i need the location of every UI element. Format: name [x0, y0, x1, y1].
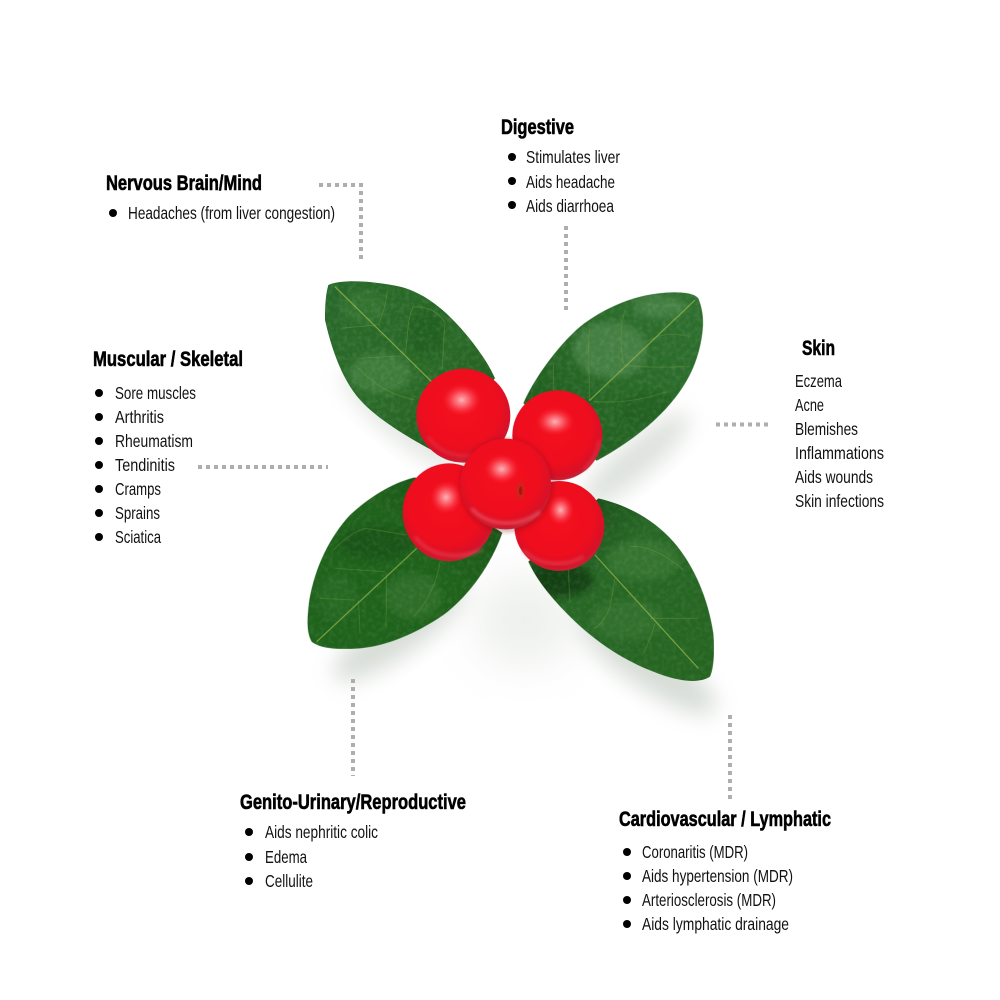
panel: digestive	[501, 116, 620, 216]
connector: nervous	[319, 185, 361, 260]
heading: Digestive	[501, 116, 574, 139]
bullet list	[623, 842, 793, 934]
bullet list: Coronaritis (MDR)	[642, 842, 748, 862]
berry: top left	[416, 369, 510, 463]
leaf: bottom right	[523, 495, 720, 685]
bullet list: Arthritis	[115, 407, 164, 427]
bullet list	[508, 147, 620, 216]
heading: Skin	[802, 337, 835, 360]
connector: skin	[716, 422, 772, 426]
bullet list: Tendinitis	[115, 455, 175, 475]
midrib	[335, 287, 432, 382]
plain list: Skin infections	[795, 491, 884, 511]
leaf and berry drop shadow	[322, 358, 728, 730]
heading: Muscular / Skeletal	[93, 348, 243, 371]
connector: genito-urinary	[351, 679, 355, 776]
heading: Nervous Brain/Mind	[106, 172, 262, 195]
connector: muscular	[198, 465, 328, 469]
connector: cardiovascular	[728, 715, 732, 800]
bullet list: Sore muscles	[115, 383, 196, 403]
berry: top right	[512, 390, 602, 480]
title: plant illustration of wintergreen leaves and berries	[303, 277, 728, 730]
midrib	[595, 555, 698, 668]
bullet list: Cellulite	[265, 871, 313, 891]
panel: genito-urinary / reproductive	[240, 791, 466, 891]
bullet list: Aids headache	[526, 172, 615, 192]
bullet list: Sciatica	[115, 527, 161, 547]
bullet list	[95, 383, 196, 547]
bullet item: Headaches (from liver congestion)	[128, 203, 335, 223]
plain list: Eczema	[795, 371, 842, 391]
bullet list: Aids hypertension (MDR)	[642, 866, 793, 886]
panel: nervous	[106, 172, 335, 223]
bullet list: Aids diarrhoea	[526, 196, 614, 216]
plain list: Aids wounds	[795, 467, 873, 487]
bullet list: Sprains	[115, 503, 160, 523]
bullet list: Cramps	[115, 479, 161, 499]
heading: Cardiovascular / Lymphatic	[619, 808, 831, 831]
bullet list	[245, 822, 378, 891]
leaf: bottom left	[303, 473, 507, 653]
bullet list: Edema	[265, 847, 307, 867]
leaf: top left	[325, 281, 495, 450]
plain list: Blemishes	[795, 419, 858, 439]
panel: cardiovascular / lymphatic	[619, 808, 831, 934]
plain list	[795, 371, 884, 511]
panel: skin	[795, 337, 884, 511]
bullet list: Aids lymphatic drainage	[642, 914, 789, 934]
bullet list: Arteriosclerosis (MDR)	[642, 890, 776, 910]
berry: centre	[460, 439, 553, 532]
bullet list: Stimulates liver	[526, 147, 620, 167]
bullet list: Rheumatism	[115, 431, 193, 451]
bullet list: Aids nephritic colic	[265, 822, 378, 842]
panel: muscular / skeletal	[93, 348, 243, 547]
connector: digestive	[564, 226, 568, 311]
leaf: top right	[520, 288, 707, 465]
heading: Genito-Urinary/Reproductive	[240, 791, 466, 814]
berry: bottom left	[403, 463, 495, 561]
midrib	[317, 548, 417, 642]
plain list: Acne	[795, 395, 824, 415]
plain list: Inflammations	[795, 443, 884, 463]
berry: bottom right	[514, 481, 604, 571]
midrib	[589, 300, 695, 401]
